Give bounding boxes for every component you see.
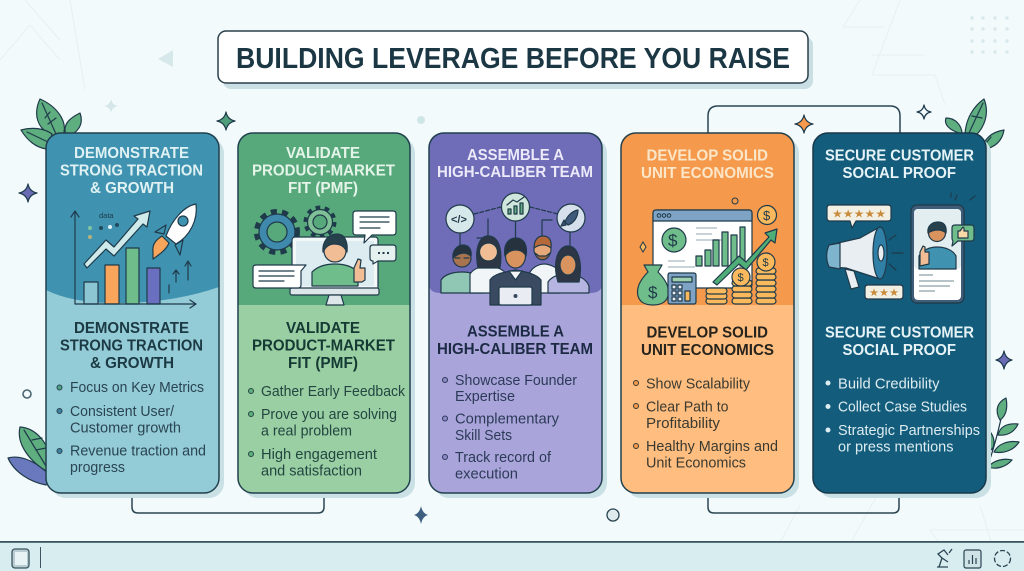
circle: bottom xyxy=(607,509,619,521)
decoration: dot grid xyxy=(970,16,1009,54)
illustration: team xyxy=(441,193,589,305)
icon: robot arm xyxy=(937,549,952,567)
bullets xyxy=(634,376,778,472)
bullets: Strategic Partnerships xyxy=(838,422,980,439)
icon: chart xyxy=(964,550,981,568)
star: green xyxy=(217,112,235,130)
connector: bottom link left xyxy=(132,493,324,513)
bullets: Collect Case Studies xyxy=(838,398,967,416)
illustration: finance dashboard: $ xyxy=(762,257,769,269)
illustration: finance dashboard: $ xyxy=(738,272,744,284)
heading: top: DEMONSTRATE xyxy=(74,145,189,162)
heading: lower: UNIT ECONOMICS xyxy=(641,342,774,359)
panel: assemble team xyxy=(429,133,607,498)
star: purple right xyxy=(996,351,1012,369)
bullets xyxy=(57,379,206,476)
heading: top: STRONG TRACTION xyxy=(60,162,203,180)
bullets: or press mentions xyxy=(838,438,954,456)
star: dark outline xyxy=(917,105,931,119)
heading: top: SECURE CUSTOMER xyxy=(825,148,974,164)
heading: top xyxy=(641,148,774,182)
panel: social proof xyxy=(813,133,991,498)
icon: dashed circle xyxy=(994,550,1010,566)
bullets: Healthy Margins and xyxy=(646,438,778,455)
bullets: Complementary xyxy=(455,410,559,428)
bullets: and satisfaction xyxy=(261,462,362,480)
bullets: Gather Early Feedback xyxy=(261,383,405,400)
bullets: High engagement xyxy=(261,446,378,463)
bullets: Build Credibility xyxy=(838,376,940,392)
star: pale xyxy=(104,99,118,113)
heading: top: DEVELOP SOLID xyxy=(646,148,768,164)
heading: lower: VALIDATE xyxy=(286,320,360,337)
title: BUILDING LEVERAGE BEFORE YOU RAISE xyxy=(236,43,790,75)
illustration: finance dashboard: $ xyxy=(668,231,678,250)
bullets: Skill Sets xyxy=(455,427,512,444)
bullets: a real problem xyxy=(261,422,352,440)
panel: validate pmf xyxy=(238,133,415,498)
leaves: bottom left xyxy=(8,427,50,485)
heading: lower: HIGH-CALIBER TEAM xyxy=(437,341,593,358)
illustration: team: </> xyxy=(451,214,467,226)
heading: lower: ASSEMBLE A xyxy=(467,324,564,340)
heading: top: PRODUCT-MARKET xyxy=(252,162,395,180)
decoration: pale dot xyxy=(417,116,425,124)
icon: slide xyxy=(12,549,29,568)
heading: lower: PRODUCT-MARKET xyxy=(252,338,395,354)
heading: lower: SOCIAL PROOF xyxy=(842,342,956,359)
heading: top: & GROWTH xyxy=(90,180,174,197)
heading: lower: DEVELOP SOLID xyxy=(646,324,768,342)
illustration: megaphone and phone: ★★★ xyxy=(869,287,900,299)
bullets: execution xyxy=(455,466,518,482)
star: purple xyxy=(19,184,37,202)
heading: top: UNIT ECONOMICS xyxy=(641,165,774,182)
bullets: Expertise xyxy=(455,388,515,405)
heading: top: FIT (PMF) xyxy=(288,180,358,197)
heading: lower xyxy=(252,320,395,372)
star: navy bottom xyxy=(414,506,428,524)
leaves: top right xyxy=(946,99,1004,150)
bullets: Focus on Key Metrics xyxy=(70,379,204,396)
heading: lower xyxy=(825,324,974,359)
illustration: finance dashboard xyxy=(637,198,777,305)
heading: lower: FIT (PMF) xyxy=(288,355,358,372)
heading: lower xyxy=(437,324,593,358)
heading: lower: DEMONSTRATE xyxy=(74,320,189,337)
decoration: pale triangle xyxy=(158,50,173,67)
leaves: top left xyxy=(21,99,81,149)
heading: top: VALIDATE xyxy=(286,145,360,162)
heading: top: HIGH-CALIBER TEAM xyxy=(437,164,593,181)
illustration: finance dashboard: $ xyxy=(763,208,771,223)
illustration: megaphone and phone xyxy=(827,193,975,303)
heading: top xyxy=(60,145,203,197)
heading: lower: STRONG TRACTION xyxy=(60,338,203,354)
heading: lower xyxy=(60,320,203,372)
bullets: Prove you are solving xyxy=(261,406,397,423)
heading: top: ASSEMBLE A xyxy=(467,147,564,164)
bullets: Show Scalability xyxy=(646,376,750,392)
chart: growth bars and rocket xyxy=(71,204,196,308)
heading: top xyxy=(252,145,395,197)
bullets: Unit Economics xyxy=(646,454,746,472)
heading: top xyxy=(437,147,593,181)
connector: bottom link right xyxy=(708,493,899,513)
panel: unit economics xyxy=(621,133,799,498)
bullets: Customer growth xyxy=(70,420,181,436)
illustration: megaphone and phone: ★★★★★ xyxy=(832,208,886,220)
bullets xyxy=(442,372,577,482)
bullets: Profitability xyxy=(646,415,721,432)
circle: left xyxy=(23,390,31,398)
illustration: finance dashboard: $ xyxy=(648,283,658,302)
panel: demonstrate traction xyxy=(46,133,224,498)
bullets xyxy=(248,383,405,480)
bullets: progress xyxy=(70,459,125,476)
bullets: Showcase Founder xyxy=(455,372,577,389)
heading: lower xyxy=(641,324,774,359)
illustration: gears and monitor xyxy=(253,208,396,305)
heading: lower: SECURE CUSTOMER xyxy=(825,324,974,342)
bullets: Clear Path to xyxy=(646,398,728,416)
bullets: Revenue traction and xyxy=(70,442,206,460)
heading: lower: & GROWTH xyxy=(90,355,174,372)
bullets: Track record of xyxy=(455,449,552,466)
bullets xyxy=(826,376,980,456)
leaves: bottom right sprig xyxy=(986,398,1019,470)
title xyxy=(218,31,813,89)
heading: top xyxy=(825,148,974,182)
connector: top link xyxy=(708,106,900,134)
star: orange xyxy=(795,115,813,133)
heading: top: SOCIAL PROOF xyxy=(842,165,956,182)
footer bar xyxy=(0,541,1024,571)
chart: growth bars and rocket: data xyxy=(99,211,114,220)
bullets: Consistent User/ xyxy=(70,403,175,420)
